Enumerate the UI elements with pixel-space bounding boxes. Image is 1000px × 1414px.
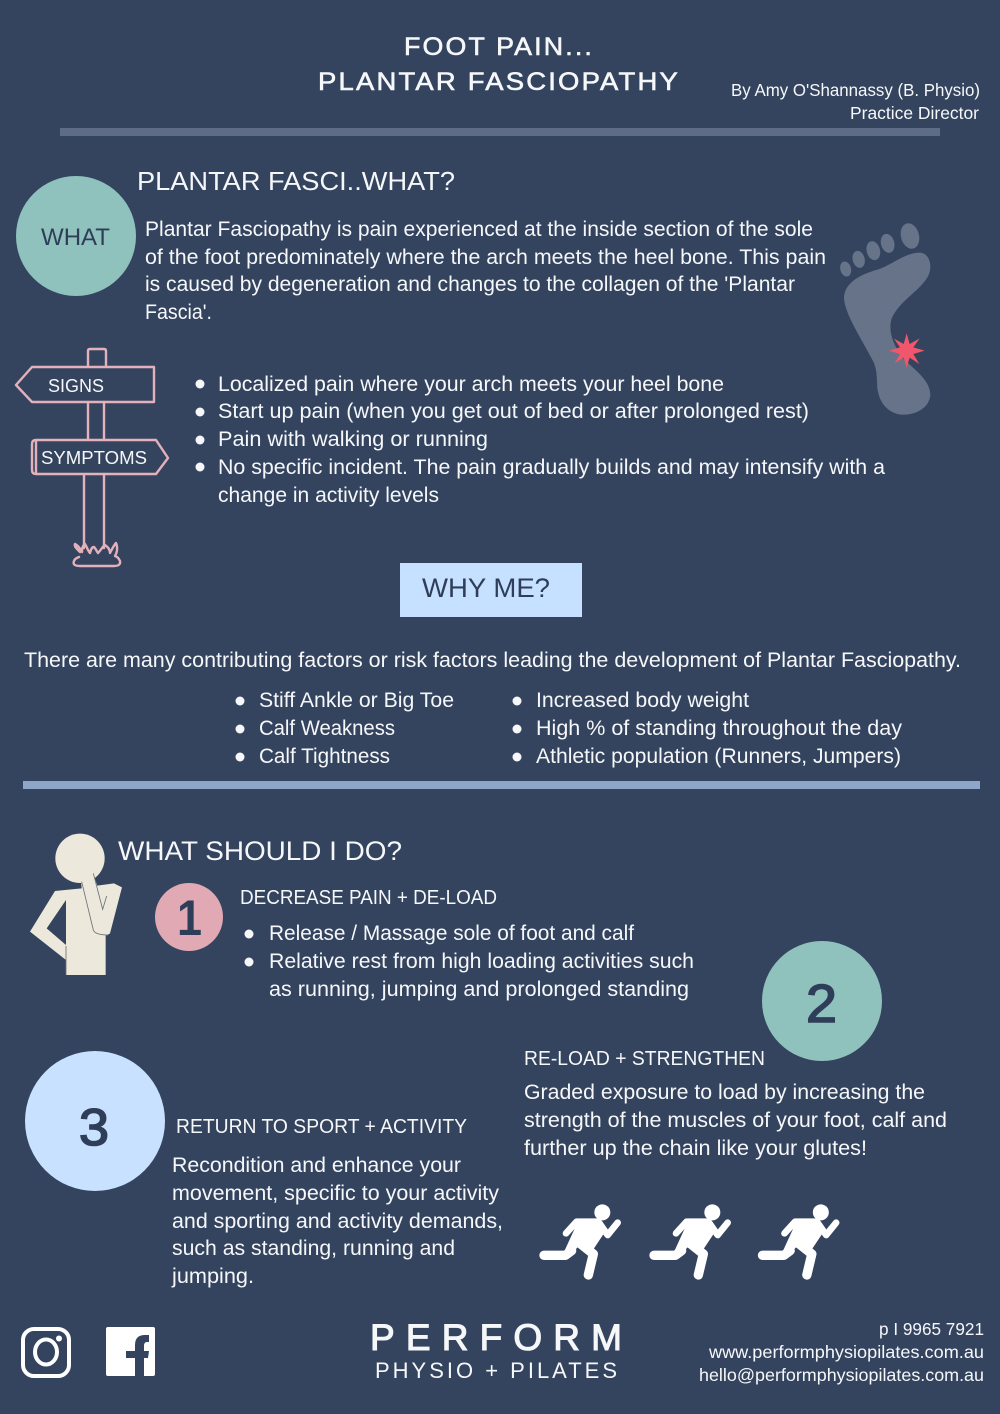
icon: facebook xyxy=(106,1327,155,1376)
text block: definition: Plantar Fasciopathy is pain experienced at the inside section of the sole xyxy=(145,217,813,241)
panel: step 2 xyxy=(524,941,947,1160)
list: signs and symptoms xyxy=(196,372,885,507)
text block: definition: is caused by degeneration and changes to the collagen of the 'Plantar xyxy=(145,272,795,296)
icon: instagram xyxy=(23,1329,69,1376)
icon: thinking person xyxy=(30,834,122,975)
text block: step 3: Recondition and enhance your xyxy=(172,1153,461,1177)
icon: foot with pain point xyxy=(839,221,930,415)
byline xyxy=(731,80,980,123)
list: step 1: Release / Massage sole of foot and calf xyxy=(269,921,634,945)
list: signs and symptoms: change in activity levels xyxy=(218,483,439,507)
title xyxy=(318,33,680,96)
text block: risk factors intro: There are many contributing factors or risk factors leading the development of Plantar Fasciopathy. xyxy=(24,648,961,672)
contact details: p I 9965 7921 xyxy=(879,1319,984,1339)
panel: step 3 xyxy=(25,1051,503,1288)
text block: step 3: such as standing, running and xyxy=(172,1236,455,1260)
list: signs and symptoms: Localized pain where your arch meets your heel bone xyxy=(218,372,724,396)
icon: runners xyxy=(544,1204,836,1275)
heading: step 3: RETURN TO SPORT + ACTIVITY xyxy=(176,1116,467,1138)
text block: step 3: jumping. xyxy=(171,1264,254,1288)
text block: step 2 xyxy=(524,1080,947,1160)
text block: step 3: movement, specific to your activity xyxy=(172,1181,499,1205)
list: risk factors left: Calf Weakness xyxy=(259,716,395,740)
list: risk factors right: High % of standing throughout the day xyxy=(536,716,902,740)
icon: runner 3 xyxy=(762,1204,836,1275)
text block: step 3: and sporting and activity demands, xyxy=(172,1209,503,1233)
heading: step 2: RE-LOAD + STRENGTHEN xyxy=(524,1048,765,1070)
list: step 1: as running, jumping and prolonged standing xyxy=(269,977,689,1001)
list: signs and symptoms: Start up pain (when you get out of bed or after prolonged rest) xyxy=(218,399,809,423)
text block: definition xyxy=(145,217,826,324)
icon: runner 2 xyxy=(654,1204,728,1275)
heading: why me xyxy=(400,563,582,617)
list: risk factors left: Calf Tightness xyxy=(259,744,390,768)
icon: what circle: WHAT xyxy=(41,224,110,251)
icon: signs and symptoms signpost: SYMPTOMS xyxy=(41,448,147,468)
icon: signs and symptoms signpost xyxy=(16,349,168,566)
list: step 1 xyxy=(244,921,694,1001)
logo: PERFORM xyxy=(370,1317,622,1358)
list: signs and symptoms: No specific incident. The pain gradually builds and may intensify with a xyxy=(218,455,885,479)
heading: plantar fasci what: PLANTAR FASCI..WHAT? xyxy=(137,166,455,196)
icon: number 3: 3 xyxy=(79,1099,109,1157)
list: risk factors right xyxy=(512,688,902,768)
list: risk factors right: Athletic population (Runners, Jumpers) xyxy=(536,744,901,768)
logo: PHYSIO + PILATES xyxy=(375,1358,617,1383)
icon: number 1 xyxy=(155,883,223,951)
list: step 1: Relative rest from high loading activities such xyxy=(269,949,694,973)
icon: number 2 xyxy=(762,941,882,1061)
list: risk factors right: Increased body weight xyxy=(536,688,749,712)
list: risk factors left: Stiff Ankle or Big Toe xyxy=(259,688,454,712)
logo xyxy=(370,1317,622,1383)
byline: By Amy O'Shannassy (B. Physio) xyxy=(731,80,980,100)
icon: what circle xyxy=(16,176,136,296)
icon: signs and symptoms signpost: SIGNS xyxy=(48,376,104,396)
list: signs and symptoms: Pain with walking or running xyxy=(218,427,488,451)
contact details xyxy=(699,1319,984,1385)
icon: number 3 xyxy=(25,1051,165,1191)
heading: why me: WHY ME? xyxy=(422,573,550,603)
panel: what xyxy=(16,166,826,324)
text block: step 2: further up the chain like your glutes! xyxy=(524,1136,867,1160)
contact details: hello@performphysiopilates.com.au xyxy=(699,1365,984,1385)
text block: definition: Fascia'. xyxy=(145,300,212,324)
heading: what should i do: WHAT SHOULD I DO? xyxy=(118,836,402,866)
list: risk factors left xyxy=(236,688,454,768)
title: PLANTAR FASCIOPATHY xyxy=(318,68,680,96)
icon: runner 1 xyxy=(544,1204,618,1275)
heading: step 1: DECREASE PAIN + DE-LOAD xyxy=(240,887,497,909)
title: FOOT PAIN... xyxy=(404,33,594,61)
text block: step 2: Graded exposure to load by increasing the xyxy=(524,1080,925,1104)
panel: step 1 xyxy=(155,883,694,1001)
icon: number 2: 2 xyxy=(806,974,837,1034)
text block: step 3 xyxy=(171,1153,503,1288)
icon: number 1: 1 xyxy=(177,890,202,946)
byline: Practice Director xyxy=(850,103,979,123)
text block: step 2: strength of the muscles of your foot, calf and xyxy=(524,1108,947,1132)
text block: definition: of the foot predominately where the arch meets the heel bone. This pain xyxy=(145,245,826,269)
contact details: www.performphysiopilates.com.au xyxy=(708,1342,984,1362)
